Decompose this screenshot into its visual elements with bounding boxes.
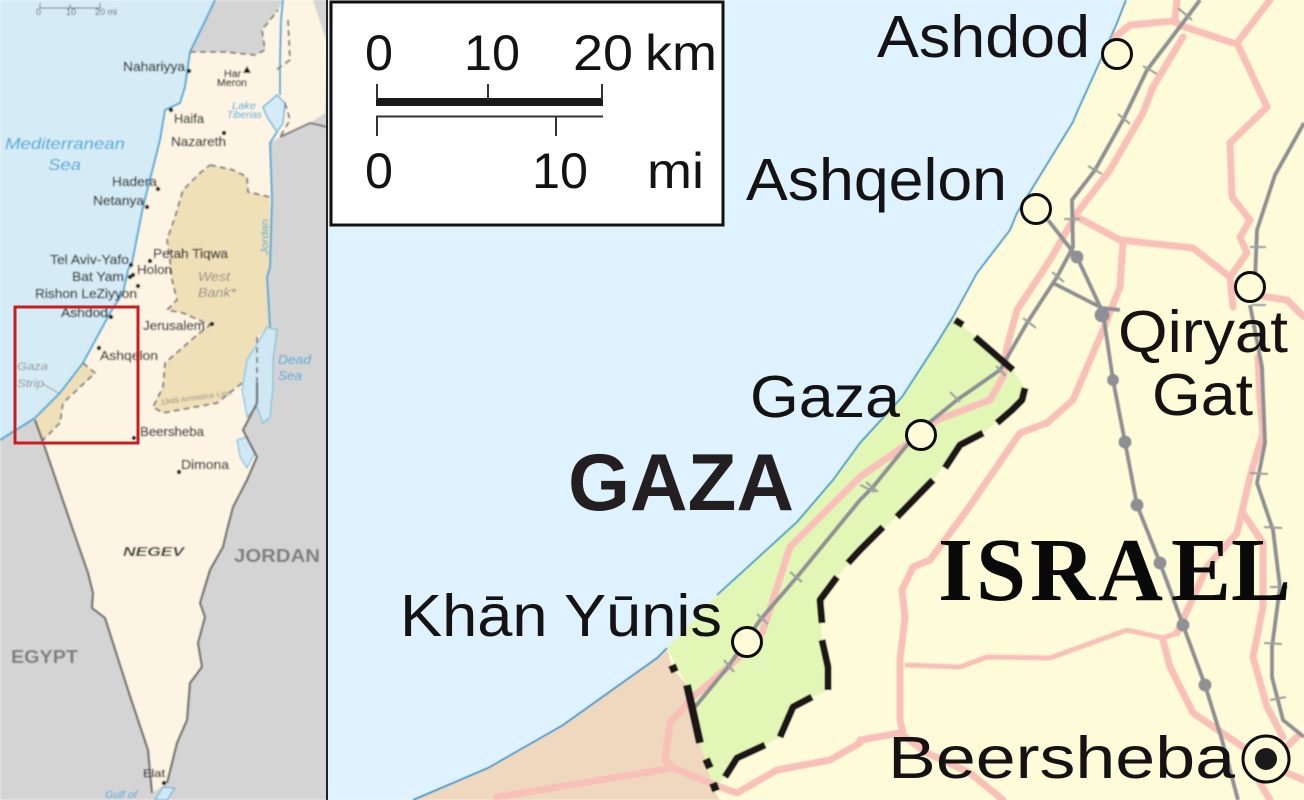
km scale: km [645, 25, 717, 81]
city marker: Qiryat Gat [1236, 272, 1264, 302]
map labels: Rishon LeZiyyon [35, 287, 137, 301]
map labels: Dimona [181, 458, 229, 472]
map labels: Beersheba [140, 425, 204, 439]
panel divider [326, 0, 328, 800]
map labels: Mediterranean [5, 136, 125, 153]
neighbouring countries background [0, 0, 327, 800]
water: Dead Sea [242, 327, 277, 423]
map labels: Hadera [112, 175, 157, 189]
label: ISRAEL: ISRAEL [938, 521, 1291, 620]
mi scale: 0 [365, 143, 393, 199]
map labels: Nahariyya [123, 60, 185, 74]
city marker: Gaza [906, 420, 936, 450]
mini scale [36, 3, 117, 17]
map labels: Sea [48, 157, 81, 174]
map labels: NEGEV [123, 545, 186, 559]
map labels: Jerusalem [143, 319, 205, 333]
land: Israel [35, 0, 327, 793]
city marker: Beersheba [1243, 736, 1289, 782]
map labels: Ashqelon [100, 349, 158, 363]
water: Gulf of Aqaba [155, 787, 175, 800]
km scale: 20 [573, 25, 633, 81]
Jordan river [267, 0, 283, 327]
label: Qiryat Gat: Gat [1152, 362, 1253, 428]
map labels: Elat [143, 768, 165, 780]
km scale [365, 25, 717, 106]
mi scale: mi [647, 143, 704, 199]
dashed boundaries [43, 10, 290, 440]
leader line: Gaza Strip [43, 384, 60, 394]
label: Qiryat Gat: Qiryat [1118, 299, 1288, 365]
Gaza border dashes [672, 320, 1025, 791]
map labels: Bank* [198, 286, 237, 300]
mi scale: 10 [532, 143, 588, 199]
panel: main Gaza map [328, 0, 1304, 800]
city marker: Khan Yunis [732, 628, 762, 656]
map labels: Tel Aviv-Yafo [50, 253, 129, 267]
map labels: Tiberias [227, 110, 262, 121]
map labels: Har [224, 69, 242, 80]
mini scale: 0 [36, 7, 41, 17]
km scale: 0 [365, 25, 393, 81]
map labels: Netanya [93, 194, 144, 208]
mini scale: 10 [66, 7, 76, 17]
Egypt border [35, 420, 152, 793]
map labels: Haifa [174, 112, 204, 126]
map labels: Lake [232, 101, 256, 112]
mini scale: 20 mi [95, 7, 117, 17]
map labels: Bat Yam [72, 270, 124, 284]
map labels: 1949 Armistice Line [160, 388, 233, 407]
map labels: Strip [17, 378, 44, 390]
land: Israel background [667, 0, 1304, 800]
map labels: Nazareth [171, 135, 226, 149]
map labels: EGYPT [11, 647, 78, 667]
label: Qiryat Gat [1121, 309, 1288, 416]
label: Khan Yunis: Khān Yūnis [400, 583, 722, 649]
city marker: Ashqelon [1022, 194, 1050, 224]
territory: Gaza Strip [667, 317, 1025, 790]
map labels: Ashdod [61, 306, 108, 320]
label: Beersheba: Beersheba [888, 725, 1235, 791]
map labels [5, 3, 320, 800]
coastline [413, 0, 1126, 800]
Golan and Syria border [280, 123, 327, 137]
label: Ashqelon: Ashqelon [746, 147, 1007, 213]
water: Lake Tiberias [263, 95, 285, 132]
map labels: Petah Tiqwa [153, 247, 228, 261]
water: southern Dead Sea basin [237, 437, 255, 468]
territory: West Bank [153, 165, 270, 413]
railways [695, 0, 1304, 800]
scale bar box [331, 2, 723, 225]
label: GAZA: GAZA [568, 438, 794, 528]
territory: Gaza Strip [35, 363, 95, 440]
map labels: Gaza [17, 361, 48, 373]
city marker: Ashdod [1102, 40, 1132, 68]
map labels: Dead [278, 353, 312, 367]
panel: locator map of Israel [0, 0, 327, 800]
map labels: Meron [217, 78, 247, 89]
label: Gaza city: Gaza [750, 364, 900, 430]
land: Egypt [413, 648, 720, 800]
map labels: JORDAN [234, 546, 320, 566]
Jordan border [167, 383, 257, 783]
sea: Mediterranean [328, 0, 1126, 800]
roads [497, 0, 1304, 800]
city markers [97, 66, 251, 785]
label: Ashdod: Ashdod [877, 4, 1090, 70]
coastline [0, 0, 215, 440]
map labels: West [198, 270, 231, 284]
sea: Mediterranean [0, 0, 215, 440]
map labels: Jordan [260, 218, 271, 256]
map labels: Holon [137, 263, 172, 277]
map labels: Sea [278, 369, 302, 383]
km scale: 10 [464, 25, 520, 81]
red locator rectangle [15, 307, 138, 443]
mi scale [365, 116, 704, 199]
